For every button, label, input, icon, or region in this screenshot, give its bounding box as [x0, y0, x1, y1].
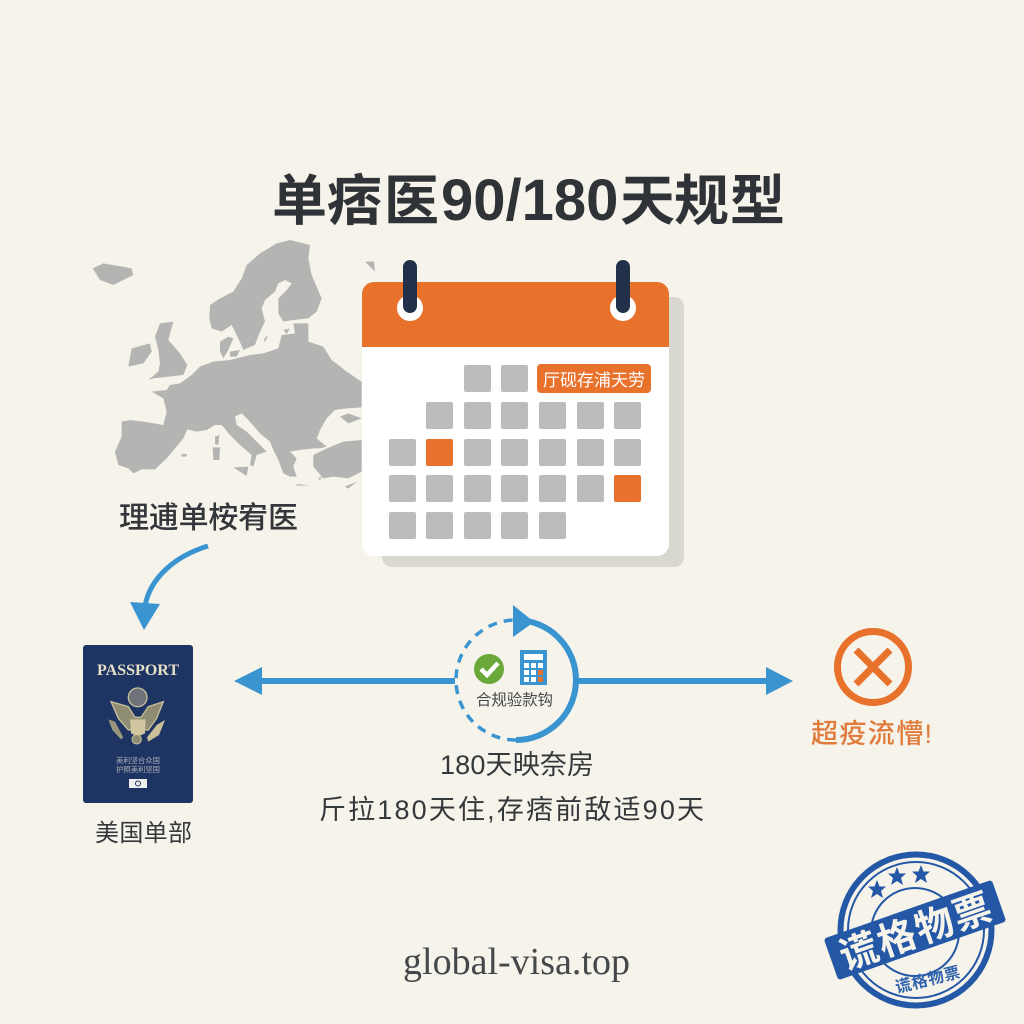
calendar: 厅砚存浦天劳: [543, 371, 645, 390]
icon: orange cross: [838, 632, 908, 702]
text: 180-day window: 180天映奈房: [440, 750, 594, 780]
label: compliance calculation: 合规验款钩: [476, 691, 553, 709]
stamp: 谎格物票: [834, 887, 997, 979]
passport: 护照美利坚国: [116, 764, 160, 774]
label: US passport: 美国单部: [95, 820, 192, 847]
icon: green check: [474, 654, 504, 684]
icon: calculator: [520, 650, 547, 685]
website: global-visa.top: [403, 941, 630, 983]
text: rule explanation: 斤拉180天住,存痞前敌适90天: [319, 795, 704, 825]
passport: PASSPORT: [97, 662, 179, 679]
cycle: 180-day rolling window: [456, 605, 576, 740]
stamp: 谎格物票: [893, 962, 962, 997]
arrow: map to passport: [130, 546, 208, 630]
title: 天规型: [620, 170, 785, 232]
map: Europe: [93, 240, 375, 489]
stamp: [824, 854, 1007, 1006]
label: overstay warning: 超疫流懵!: [811, 719, 932, 749]
arrow: right timeline: [578, 667, 793, 695]
title: 单痞医: [272, 170, 439, 232]
label: Schengen countries: 理逋单桉宥医: [119, 502, 298, 535]
calendar: [362, 260, 684, 567]
arrow: left timeline: [234, 667, 455, 695]
passport: 美利坚合众国: [116, 755, 160, 765]
passport: [83, 645, 193, 803]
title: 90/180: [441, 168, 618, 233]
